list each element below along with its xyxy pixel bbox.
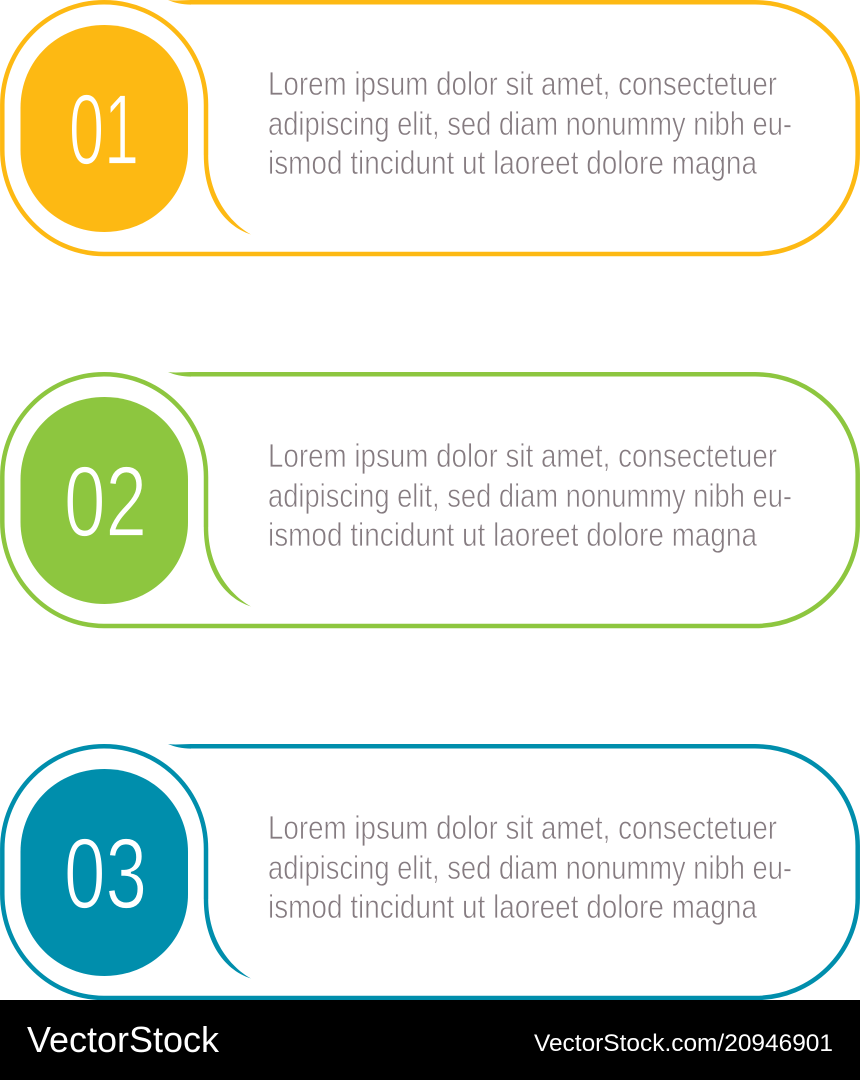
footer: watermark bar (0, 1000, 860, 1080)
text block: ismod tincidunt ut laoreet dolore magna (268, 516, 758, 553)
text block (268, 437, 792, 553)
panel outline (2, 372, 858, 626)
text block (268, 809, 792, 925)
number 02: 02 (64, 446, 147, 558)
panel outline (2, 0, 858, 254)
text block: ismod tincidunt ut laoreet dolore magna (268, 144, 758, 181)
footer brand name: VectorStock (27, 1019, 220, 1060)
text block: ismod tincidunt ut laoreet dolore magna (268, 888, 758, 925)
text block: Lorem ipsum dolor sit amet, consectetuer (268, 65, 777, 102)
panel: option 02 (2, 372, 858, 626)
number badge (20, 25, 188, 232)
number 01: 01 (69, 74, 139, 186)
panel: option 01 (2, 0, 858, 254)
number badge (20, 769, 188, 976)
text block (268, 65, 792, 181)
number 03: 03 (64, 818, 147, 930)
panel outline (2, 744, 858, 998)
footer image reference: VectorStock.com/20946901 (534, 1030, 833, 1057)
panel: option 03 (2, 744, 858, 998)
footer background (0, 1000, 860, 1080)
text block: Lorem ipsum dolor sit amet, consectetuer (268, 809, 777, 846)
text block: Lorem ipsum dolor sit amet, consectetuer (268, 437, 777, 474)
number badge (20, 397, 188, 604)
